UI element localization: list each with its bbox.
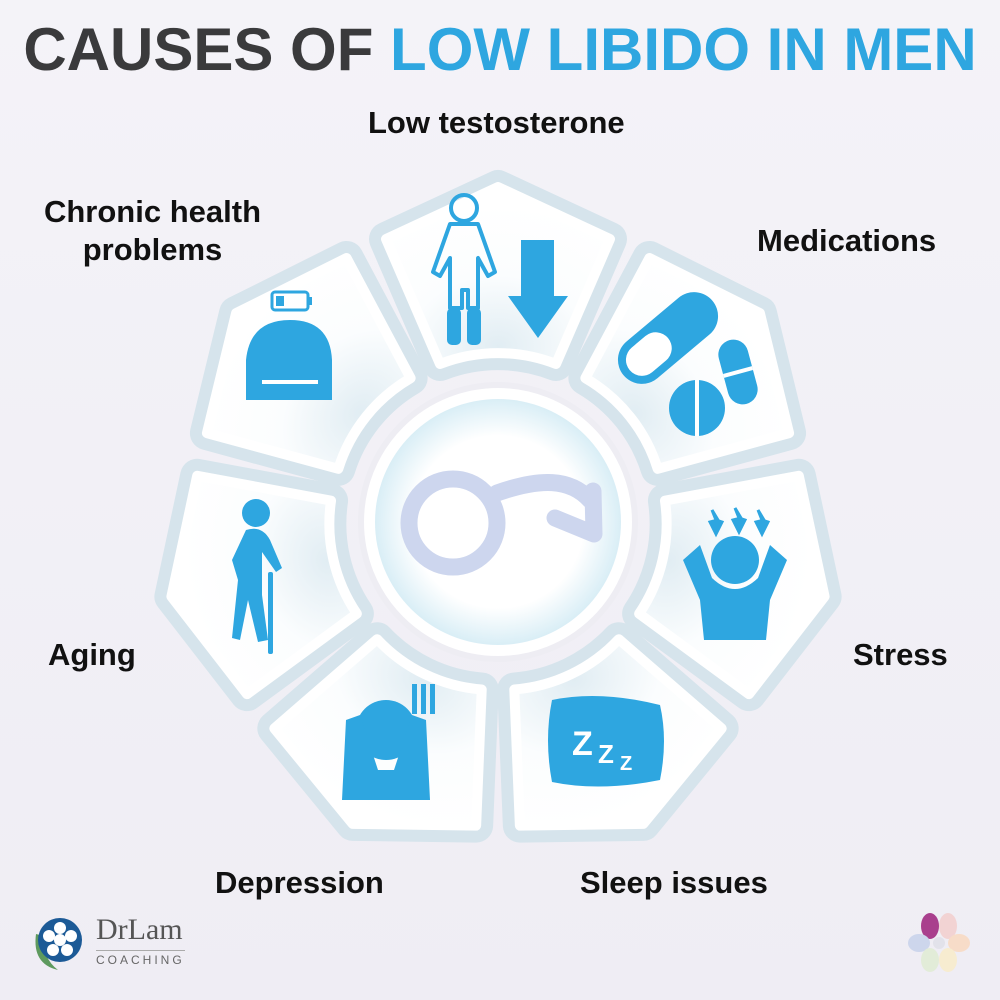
logo: DrLam coaching [36, 913, 185, 970]
label: depression: Depression [215, 865, 384, 900]
icon: aging [232, 499, 282, 654]
logo: flower [908, 913, 970, 972]
logo: DrLam coaching: DrLam [96, 913, 183, 946]
label: low testosterone: Low testosterone [368, 105, 625, 140]
icon: medications [608, 282, 761, 436]
title: CAUSES OF LOW LIBIDO IN MEN [23, 16, 977, 83]
label: sleep issues: Sleep issues [580, 865, 768, 900]
label: stress: Stress [853, 637, 948, 672]
icon: sleep pillow: Z [598, 739, 614, 769]
icon: low testosterone [433, 195, 568, 345]
icon: male symbol arrow [409, 479, 594, 567]
icon: sleep pillow: Z [572, 725, 593, 763]
label: aging: Aging [48, 637, 136, 672]
icon: sleep pillow: Z [620, 753, 632, 775]
icon: stress [683, 508, 787, 640]
icon: chronic health [246, 292, 332, 400]
label: medications: Medications [757, 223, 936, 258]
label: chronic health problems: Chronic health problems [44, 194, 261, 267]
segments [146, 187, 850, 872]
icon: depression [342, 684, 435, 800]
icon: sleep pillow [548, 696, 664, 787]
logo: DrLam coaching: COACHING [96, 953, 185, 967]
center circle [361, 385, 635, 659]
